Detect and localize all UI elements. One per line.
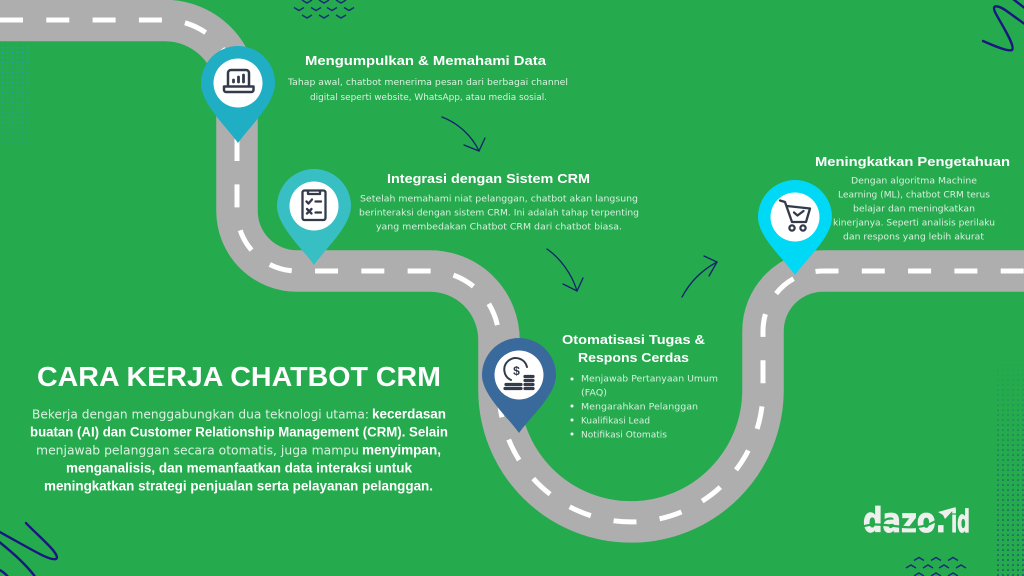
step 2 text: Setelah memahami niat pelanggan, chatbot akan langsung (360, 194, 638, 204)
step 1 text: digital seperti website, WhatsApp, atau media sosial. (310, 93, 547, 103)
intro paragraph: menganalisis, dan memanfaatkan data interaksi untuk (66, 460, 412, 476)
step 3 text: Notifikasi Otomatis (581, 430, 667, 440)
step 3 text: Otomatisasi Tugas & (562, 332, 705, 347)
step 2 text (359, 171, 639, 232)
step 4 text (815, 154, 1010, 242)
intro paragraph: Bekerja dengan menggabungkan dua teknologi utama: (32, 408, 369, 422)
logo: dazo.id: id (951, 504, 970, 540)
arrow 2 (547, 249, 583, 291)
intro paragraph (30, 406, 448, 494)
icon: dollar coins: $ (513, 364, 520, 378)
step 4 text: Dengan algoritma Machine (851, 176, 977, 186)
dot pattern: left (0, 43, 29, 143)
step 4 text: belajar dan meningkatkan (853, 204, 975, 214)
pin 1: laptop (201, 46, 275, 143)
step 1 text: Mengumpulkan & Memahami Data (305, 53, 547, 68)
step 4 text: dan respons yang lebih akurat (843, 232, 984, 242)
step 2 text: Integrasi dengan Sistem CRM (387, 171, 590, 186)
step 3 text: Mengarahkan Pelanggan (581, 402, 698, 412)
chevrons: bottom (906, 558, 966, 576)
dot pattern: right (996, 358, 1024, 576)
logo: dazo.id: dazo. (863, 501, 946, 541)
step 3 text: (FAQ) (581, 388, 607, 398)
pin 2: clipboard (277, 169, 351, 265)
intro paragraph: buatan (AI) dan Customer Relationship Management (CRM). Selain (30, 424, 448, 440)
step 4 text: Meningkatkan Pengetahuan (815, 154, 1010, 169)
step 1 text (287, 53, 568, 103)
intro paragraph: menyimpan, (362, 442, 441, 458)
step 2 text: berinteraksi dengan sistem CRM. Ini adalah tahap terpenting (359, 208, 639, 218)
pin 4: cart (758, 180, 832, 275)
icon: clipboard checklist (302, 190, 326, 220)
step 3 text (562, 332, 718, 440)
arrow 3 (682, 256, 717, 297)
intro paragraph: meningkatkan strategi penjualan serta pelayanan pelanggan. (44, 478, 433, 494)
step 3 text: Menjawab Pertanyaan Umum (581, 374, 718, 384)
step 4 text: Learning (ML), chatbot CRM terus (838, 190, 990, 200)
step 3 text: Kualifikasi Lead (581, 416, 650, 426)
title: CARA KERJA CHATBOT CRM (37, 361, 441, 392)
squiggle: bottom left (0, 523, 57, 576)
chevrons: top (294, 0, 354, 18)
icon: shopping cart (780, 200, 810, 231)
arrow 1 (442, 117, 485, 151)
step 2 text: yang membedakan Chatbot CRM dari chatbot biasa. (376, 222, 622, 232)
step 3 text: Respons Cerdas (578, 350, 689, 365)
intro paragraph: menjawab pelanggan secara otomatis, juga mampu (36, 444, 359, 458)
step 4 text: kinerjanya. Seperti analisis perilaku (833, 218, 995, 228)
pin 3: coins (482, 338, 556, 433)
squiggle: top right (983, 0, 1024, 50)
icon: laptop chart (224, 70, 254, 92)
intro paragraph: kecerdasan (372, 406, 446, 422)
step 1 text: Tahap awal, chatbot menerima pesan dari berbagai channel (287, 78, 568, 88)
